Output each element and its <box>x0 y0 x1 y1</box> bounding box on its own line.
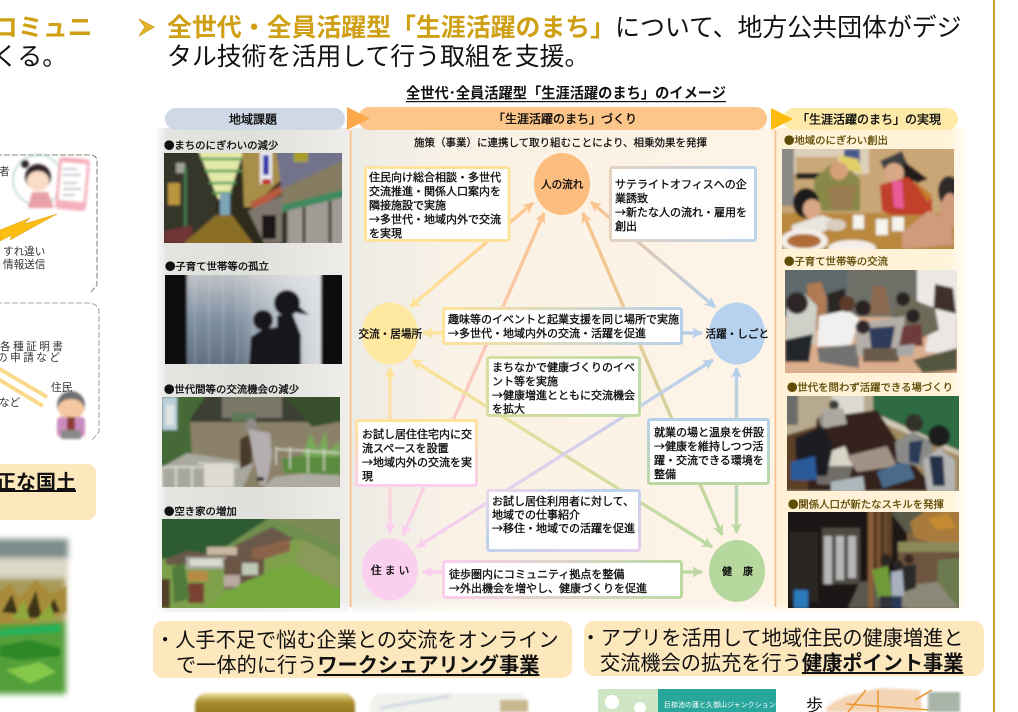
panel: walking map poster, teal header, cropped: 巨椋池の蓮と久御山ジャンクション <box>664 700 776 710</box>
node: activity and work <box>706 302 769 364</box>
node: flow of people <box>534 153 590 215</box>
photo: gold interior, cropped <box>195 693 355 712</box>
arrow: flow to health <box>583 213 722 535</box>
box: trial housing exchange space: お試し居住住宅内に交 <box>362 426 472 442</box>
box: hobby events: →多世代・地域内外の交流・活躍を促進 <box>448 325 646 341</box>
box: trial housing exchange space: 現 <box>362 468 373 484</box>
arrow: flow to housing <box>403 213 544 535</box>
box: job introduction: →移住・地域での活躍を促進 <box>492 520 635 536</box>
panel: cropped left dashed box, resident application: 各種証明書 <box>0 339 65 354</box>
arrow: exchange to health <box>412 360 712 547</box>
label: lively community: ●地域のにぎわい創出 <box>784 132 888 147</box>
center panel side rule left <box>350 130 352 607</box>
box: resident consultation: →多世代・地域内外で交流 <box>369 211 501 227</box>
center panel side rule right <box>774 130 776 607</box>
arrow: box to work <box>680 331 702 335</box>
arrow: exchange to housing <box>388 368 392 533</box>
arrow: work to health <box>735 368 738 533</box>
photo: parent and child silhouette <box>165 275 342 364</box>
box: community hub <box>444 562 682 598</box>
panel: cropped left dashed box, passing notification: 情報送信 <box>3 257 46 272</box>
box: resident consultation: を実現 <box>369 225 402 241</box>
arrow network <box>390 202 736 572</box>
heading pill: realization <box>771 108 958 130</box>
box: resident consultation: 住民向け総合相談・多世代 <box>369 169 501 185</box>
arrow: housing to box <box>423 570 445 574</box>
arrow: exchange to box <box>423 331 445 335</box>
panel: cropped left dashed box, passing notification: すれ違い <box>3 244 45 259</box>
text: synergy note: 施策（事業）に連携して取り組むことにより、相乗効果を発揮 <box>414 135 708 150</box>
box: health events in town <box>488 358 640 416</box>
box: job introduction: 地域での仕事紹介 <box>492 506 580 522</box>
photo: people eating at a table <box>782 149 954 249</box>
photo: shuttered shopping arcade <box>164 153 342 243</box>
box: hobby events <box>444 308 682 344</box>
icon: smartphone <box>55 157 90 211</box>
label: active at any age: ●世代を問わず活躍できる場づくり <box>787 379 953 394</box>
label: isolated families: ●子育て世帯等の孤立 <box>165 258 269 273</box>
box: job introduction <box>488 490 640 550</box>
box: trial housing exchange space: 流スペースを設置 <box>362 440 449 456</box>
box: work and hot spring <box>648 420 768 484</box>
box: health events in town: まちなかで健康づくりのイベ <box>492 359 635 375</box>
box: health events in town: →健康増進とともに交流機会 <box>492 387 635 403</box>
box: work and hot spring: 就業の場と温泉を併設 <box>654 424 764 440</box>
title: 全世代･全員活躍型「生涯活躍のまち」のイメージ <box>406 82 726 103</box>
panel: realization background <box>777 128 969 616</box>
node: flow of people: 人の流れ <box>541 177 584 192</box>
icon: elderly resident <box>57 391 85 439</box>
box: community hub: 徒歩圏内にコミュニティ拠点を整備 <box>449 566 624 582</box>
box: resident consultation: 交流推進・関係人口案内を <box>369 183 501 199</box>
callout: work sharing project: で一体的に行うワークシェアリング事業 <box>176 649 539 678</box>
callout: work sharing project <box>153 621 572 678</box>
box: work and hot spring: 躍・交流できる環境を <box>654 452 764 468</box>
node: exchange and place <box>358 302 422 364</box>
node: health <box>709 540 765 602</box>
node: housing: 住まい <box>371 563 412 578</box>
label: skills of related population: ●関係人口が新たなスキルを発揮 <box>788 496 944 511</box>
icon: lightning bolt <box>0 214 57 241</box>
panel: cropped left dashed box, passing notification <box>0 155 97 292</box>
box: satellite office: 創出 <box>615 218 637 234</box>
callout: cropped left <box>0 464 96 520</box>
icon: woman <box>13 155 63 208</box>
label: family exchange: ●子育て世帯等の交流 <box>784 253 889 268</box>
box: work and hot spring: 整備 <box>654 466 676 482</box>
box: satellite office: サテライトオフィスへの企 <box>615 176 747 192</box>
box: work and hot spring: →健康を維持しつつ活 <box>654 438 763 454</box>
photo: people at old wooden house <box>788 512 959 608</box>
panel: walking map, cropped <box>806 688 960 712</box>
box: satellite office: 業誘致 <box>615 190 648 206</box>
photo: bright interior, cropped <box>370 693 528 712</box>
box: health events in town: ント等を実施 <box>492 373 558 389</box>
photo: abandoned house <box>162 519 340 608</box>
label: less intergenerational exchange: ●世代間等の交流機会の減少 <box>164 381 300 396</box>
box: resident consultation <box>366 168 509 241</box>
arrow: box to health <box>680 570 702 574</box>
heading pill: regional issues <box>165 108 345 130</box>
heading pill: regional issues: 地域課題 <box>229 110 277 128</box>
panel: cropped left dashed box, resident application: 住民 <box>51 380 73 395</box>
callout: health point project: 交流機会の拡充を行う健康ポイント事業 <box>600 647 963 676</box>
arrows: yellow stripes <box>0 368 47 406</box>
node: health: 健 <box>722 563 732 578</box>
box: trial housing exchange space <box>356 420 476 486</box>
panel: regional issues background <box>155 128 349 618</box>
heading: lifelong active town: タル技術を活用して行う取組を支援。 <box>167 37 589 73</box>
photo: craft workshop classroom <box>787 396 959 491</box>
box: hobby events: 趣味等のイベントと起業支援を同じ場所で実施 <box>448 311 679 327</box>
arrow: exchange to flow <box>410 203 533 307</box>
callout: work sharing project: ・人手不足で悩む企業との交流をオンライン <box>155 624 559 653</box>
box: community hub: →外出機会を増やし、健康づくりを促進 <box>449 580 647 596</box>
heading: lifelong active town: 全世代・全員活躍型「生涯活躍のまち」について、地方公共団体がデジ <box>167 8 962 44</box>
heading: lifelong active town <box>167 8 962 73</box>
node: activity and work: 活躍・しごと <box>706 326 769 342</box>
heading pill: town building: 「生涯活躍のまち」づくり <box>493 110 637 127</box>
label: less lively town: ●まちのにぎわいの減少 <box>164 137 279 152</box>
box: trial housing exchange space: →地域内外の交流を実 <box>362 454 472 470</box>
node: exchange and place: 交流・居場所 <box>358 326 422 342</box>
panel: walking map poster, teal header, cropped <box>598 689 776 712</box>
photo: elderly person with walker in park <box>162 397 340 487</box>
box: satellite office: →新たな人の流れ・雇用を <box>615 204 747 220</box>
node: housing <box>362 538 418 600</box>
callout: health point project <box>580 621 984 676</box>
icon: heading bullet arrow <box>139 19 154 36</box>
arrow: work to housing <box>417 360 713 547</box>
box: satellite office <box>610 168 756 240</box>
box: resident consultation: 隣接施設で実施 <box>369 197 446 213</box>
callout: health point project: ・アプリを活用して地域住民の健康増進と <box>580 622 963 651</box>
box: job introduction: お試し居住利用者に対して、 <box>492 493 634 509</box>
label: more vacant houses: ●空き家の増加 <box>164 503 237 518</box>
right border line <box>993 0 995 712</box>
arrow: flow to work <box>591 202 715 307</box>
heading pill: town building <box>347 107 767 130</box>
cropped heading at left <box>0 8 93 73</box>
picture: terrain map <box>0 539 68 694</box>
photo: families sitting on floor <box>785 270 957 373</box>
panel: town building background <box>351 128 776 618</box>
node: health: 康 <box>743 563 753 578</box>
box: health events in town: を拡大 <box>492 400 525 416</box>
heading pill: realization: 「生涯活躍のまち」の実現 <box>797 110 941 128</box>
panel: cropped left dashed box, resident application <box>0 303 99 440</box>
